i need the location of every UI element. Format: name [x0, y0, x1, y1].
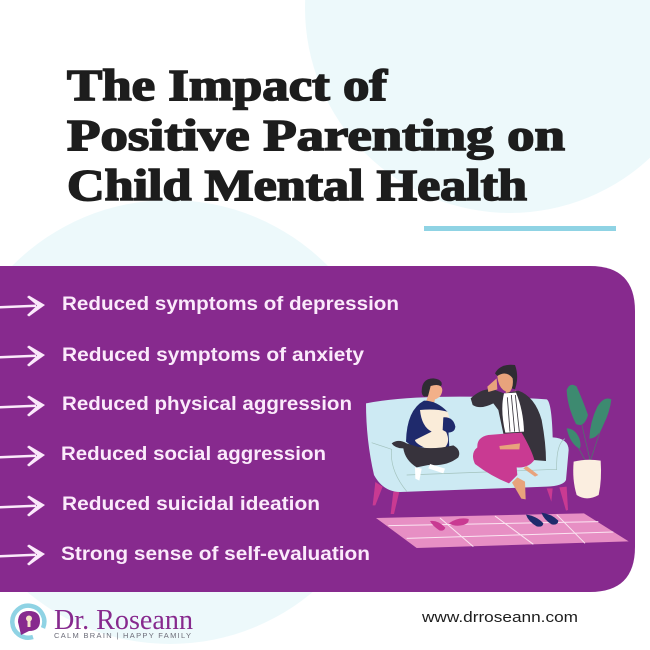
slippers: [430, 513, 558, 531]
benefits list: [0, 294, 399, 566]
title: The Impact of: [67, 61, 389, 110]
sofa: [366, 397, 569, 514]
panel: benefits: [0, 266, 635, 592]
title: [67, 61, 565, 210]
parent legs: [473, 433, 534, 483]
title: Positive Parenting on: [67, 111, 565, 160]
arrow 3: [0, 396, 45, 416]
child: [392, 378, 459, 481]
logo tagline: CALM BRAIN | HAPPY FAMILY: [54, 631, 191, 640]
arrow 1: [0, 296, 45, 316]
plant: [567, 385, 611, 498]
item 6: Strong sense of self-evaluation: [61, 544, 370, 565]
accent line: [424, 226, 616, 231]
logo icon: [12, 606, 44, 638]
item 1: Reduced symptoms of depression: [62, 294, 399, 315]
arrow 4: [0, 446, 45, 466]
item 2: Reduced symptoms of anxiety: [62, 345, 364, 366]
logo name: Dr. Roseann: [54, 604, 193, 636]
arrow 5: [0, 496, 45, 516]
illustration: parent and child on sofa: [366, 365, 629, 548]
child arm: [443, 417, 455, 433]
title: Child Mental Health: [67, 161, 527, 210]
parent: [471, 365, 546, 499]
item 5: Reduced suicidal ideation: [62, 494, 320, 515]
arrow 6: [0, 544, 45, 566]
website: www.drroseann.com: [421, 610, 578, 626]
arrow 2: [0, 346, 45, 366]
logo: [12, 604, 193, 640]
rug: [376, 513, 629, 548]
item 4: Reduced social aggression: [61, 444, 326, 465]
item 3: Reduced physical aggression: [62, 394, 352, 415]
